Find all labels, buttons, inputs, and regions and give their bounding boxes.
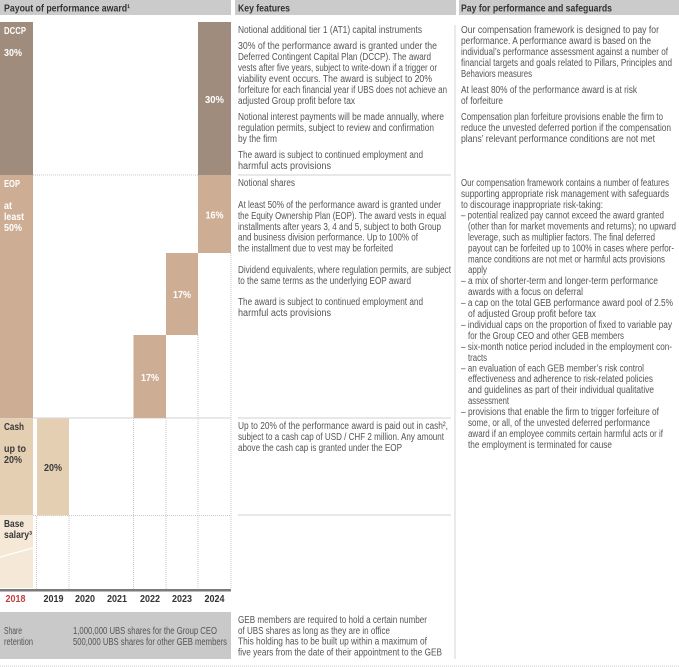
text block: EOP key features: Notional shares — [238, 178, 295, 189]
text block: safeguards: of adjusted Group profit before tax — [468, 309, 596, 320]
text block: EOP key features: installments after years 3, 4 and 5, subject to both Group — [238, 222, 441, 233]
text block: safeguards: the employment is terminated for cause — [468, 440, 612, 451]
EOP label bar — [0, 175, 33, 418]
panel: share retention: Share — [4, 626, 22, 637]
EOP 2024 bar — [198, 175, 231, 253]
text block: cash key features — [238, 421, 448, 454]
text block: cash key features: Up to 20% of the performance award is paid out in cash², — [238, 421, 448, 432]
cash label bar — [0, 418, 33, 516]
text block: EOP key features: The award is subject to continued employment and — [238, 297, 423, 308]
text block: EOP key features: At least 50% of the performance award is granted under — [238, 200, 442, 211]
panel: share retention: 500,000 UBS shares for other GEB members — [73, 637, 227, 648]
panel: share retention — [0, 612, 231, 659]
text block: EOP key features: the installment due to vest may be forfeited — [238, 244, 393, 254]
EOP 2023 bar — [166, 253, 198, 335]
panel: share retention: 1,000,000 UBS shares for the Group CEO — [73, 626, 217, 637]
text block: EOP key features: and business division performance. Up to 100% of — [238, 232, 418, 244]
year labels: 2022 — [140, 593, 160, 605]
base salary bar: salary³ — [4, 529, 32, 541]
text block: pay for performance: At least 80% of the performance award is at risk — [461, 85, 638, 96]
heading: key features — [235, 0, 456, 15]
EOP label bar: EOP — [4, 178, 20, 190]
text block: safeguards: apply — [468, 265, 487, 276]
cash 2019 bar: 20% — [44, 462, 63, 474]
DCCP 2024 bar — [198, 22, 231, 175]
text block: EOP key features — [238, 178, 451, 319]
DCCP label bar: DCCP — [4, 25, 26, 37]
text block: share retention key features: This holding has to be built up within a maximum of — [238, 636, 427, 648]
heading: pay for performance and safeguards — [459, 0, 679, 15]
EOP 2022 bar: 17% — [141, 372, 160, 384]
text block: cash key features: above the cash cap is granted under the EOP — [238, 443, 402, 454]
text block: safeguards: tracts — [468, 353, 487, 364]
text block: DCCP key features: 30% of the performance award is granted under the — [238, 41, 437, 52]
year labels: 2020 — [75, 593, 95, 605]
EOP label bar: at — [4, 200, 12, 212]
text block: DCCP key features: by the firm — [238, 134, 277, 145]
text block: EOP key features: Dividend equivalents, where regulation permits, are subject — [238, 265, 451, 276]
text block: DCCP key features: Deferred Contingent Capital Plan (DCCP). The award — [238, 52, 431, 63]
year labels — [6, 593, 225, 605]
EOP label bar: least — [4, 211, 24, 223]
text block: share retention key features — [238, 615, 442, 658]
text block: DCCP key features: regulation permits, subject to review and confirmation — [238, 123, 434, 134]
text block: DCCP key features: forfeiture for each financial year if UBS does not achieve an — [238, 85, 447, 96]
text block: safeguards: for the Group CEO and other GEB members — [468, 331, 624, 342]
text block: DCCP key features: Notional additional tier 1 (AT1) capital instruments — [238, 25, 422, 36]
text block: safeguards: to discourage inappropriate risk-taking: — [461, 200, 603, 211]
year labels: 2019 — [44, 593, 64, 605]
cash label bar: Cash — [4, 421, 24, 433]
year labels: 2024 — [204, 593, 225, 605]
text block: EOP key features: to the same terms as the underlying EOP award — [238, 276, 411, 287]
EOP label bar: 50% — [4, 222, 23, 234]
panel: share retention: retention — [4, 637, 33, 648]
text block: DCCP key features: Notional interest payments will be made annually, where — [238, 112, 444, 123]
year labels: 2021 — [107, 593, 127, 605]
text block: DCCP key features: harmful acts provisions — [238, 161, 331, 172]
text block: EOP key features: harmful acts provisions — [238, 308, 331, 319]
text block: cash key features: subject to a cash cap of USD / CHF 2 million. Any amount — [238, 432, 444, 443]
text block: pay for performance: of forfeiture — [461, 96, 503, 107]
year labels: 2023 — [172, 593, 192, 605]
year labels: 2018 — [6, 593, 26, 605]
heading: key features: Key features — [238, 2, 290, 14]
text block: pay for performance: Behaviors measures — [461, 69, 532, 80]
text block: safeguards: assessment — [468, 396, 509, 407]
text block: DCCP key features: viability event occurs. The award is subject to 20% — [238, 74, 432, 85]
text block: share retention key features: GEB members are required to hold a certain number — [238, 615, 428, 626]
cash 2019 bar — [37, 418, 69, 516]
text block: DCCP key features: adjusted Group profit before tax — [238, 96, 355, 107]
panel: payout chart — [0, 22, 231, 605]
DCCP 2024 bar: 30% — [205, 94, 225, 106]
text block: safeguards — [461, 178, 676, 451]
text block: pay for performance: plans’ relevant performance conditions are not met — [461, 134, 655, 145]
text block: share retention key features: of UBS shares as long as they are in office — [238, 626, 390, 637]
text block: EOP key features: the Equity Ownership Plan (EOP). The award vests in equal — [238, 211, 446, 222]
cash label bar: up to — [4, 443, 26, 455]
text block: pay for performance — [461, 25, 672, 145]
EOP 2023 bar: 17% — [173, 289, 192, 301]
DCCP label bar: 30% — [4, 47, 23, 59]
heading: payout of performance award: Payout of performance award¹ — [4, 2, 130, 14]
text block: share retention key features: five years from the date of their appointment to the GEB — [238, 648, 442, 658]
text block: DCCP key features: The award is subject to continued employment and — [238, 150, 423, 161]
EOP 2024 bar: 16% — [206, 210, 224, 222]
text block: DCCP key features: vests after five years, subject to write-down if a trigger or — [238, 63, 438, 74]
base salary bar: Base — [4, 518, 24, 530]
text block: DCCP key features — [238, 25, 447, 172]
heading: payout of performance award — [0, 0, 231, 15]
cash label bar: 20% — [4, 454, 23, 466]
timeline axis — [0, 589, 231, 592]
text block: safeguards: awards with a focus on deferral — [468, 287, 583, 298]
base salary bar — [0, 516, 33, 588]
EOP 2022 bar — [134, 335, 166, 418]
DCCP label bar — [0, 22, 33, 175]
heading: pay for performance and safeguards: Pay for performance and safeguards — [461, 2, 612, 14]
